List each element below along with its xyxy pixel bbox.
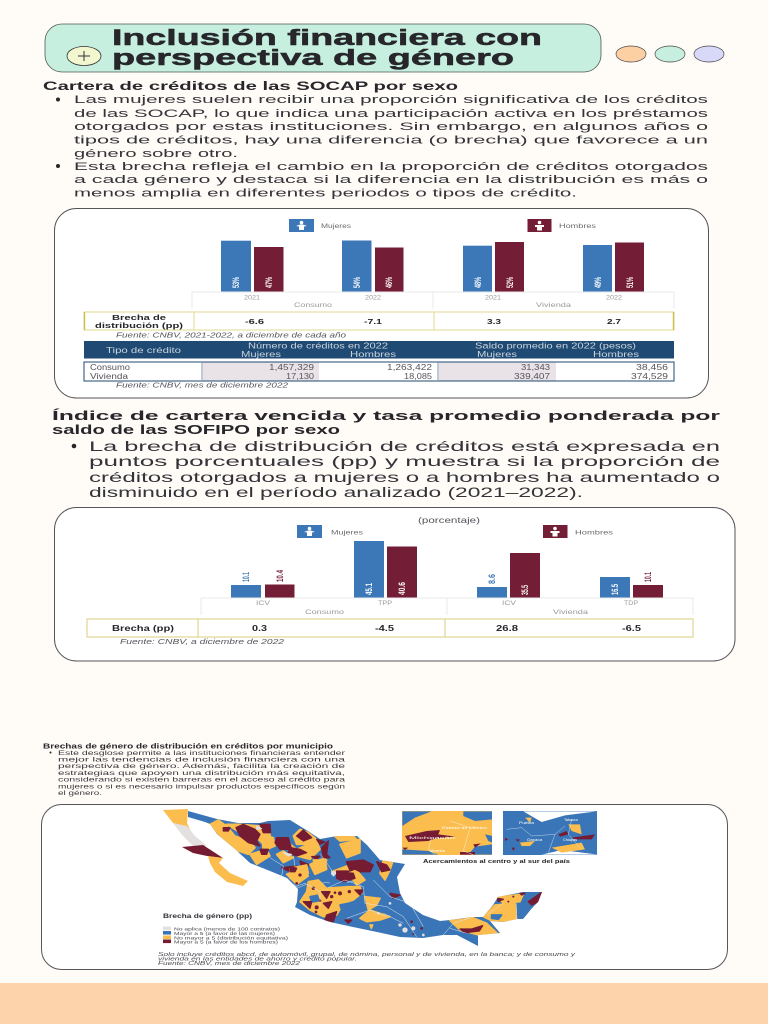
bar chart: SOCAP share by sex: Vivienda (536, 303, 572, 309)
table: créditos and saldo: Mujeres (241, 350, 281, 359)
map legend: No mayor a 5 (distribución equitativa) (174, 936, 289, 942)
text block: SOCAP bullets: menos amplia en diferentes periodos o tipos de crédito. (74, 188, 577, 200)
bar chart: ICV and TPP: 35.5 (520, 585, 530, 595)
table: créditos and saldo: 31,343 (521, 363, 551, 372)
table: créditos and saldo: Número de créditos en 2022 (248, 342, 389, 350)
central and south municipalities (290, 860, 542, 937)
heading: SOFIPO section (52, 408, 720, 437)
icon: plus badge (67, 46, 101, 66)
text block: SOFIPO bullet: La brecha de distribución de créditos está expresada en (89, 438, 720, 454)
source note: Fuente: CNBV, 2021-2022, a diciembre de cada año (116, 330, 346, 340)
mainland (188, 811, 542, 946)
table: créditos and saldo: 17,130 (286, 372, 315, 381)
bar chart: ICV and TPP: TPP (378, 601, 392, 607)
inset map: centre: Morelos (430, 848, 445, 853)
map legend: Brecha de género (pp) (163, 913, 252, 920)
text block: SOFIPO bullet: disminuido en el período analizado (2021–2022). (89, 484, 583, 500)
bar chart: SOCAP share by sex: 52% (505, 277, 515, 288)
inset map: south: Oaxaca (527, 837, 543, 842)
table row: brecha de distribución: distribución (pp) (95, 321, 184, 330)
title text (112, 25, 542, 70)
text block: SOFIPO bullet: puntos porcentuales (pp) y muestra si la proporción de (89, 453, 720, 469)
table: créditos and saldo: Vivienda (90, 372, 129, 381)
inset map: south: Puebla (519, 820, 535, 825)
bar chart: ICV and TPP: 16.5 (610, 584, 620, 595)
table row: brecha de distribución: -6.6 (245, 317, 264, 326)
table: créditos and saldo: 374,529 (631, 372, 669, 381)
bar chart: SOCAP share by sex: 51% (625, 277, 635, 288)
title banner (45, 24, 601, 72)
text block: SOCAP bullets: a cada género y destaca si la diferencia en la distribución es más o (74, 174, 708, 186)
text block: SOFIPO bullet: créditos otorgados a mujeres o a hombres ha aumentado o (89, 469, 720, 485)
bar chart: SOCAP share by sex: 48% (473, 277, 483, 288)
bar chart: ICV and TPP: 45.1 (364, 583, 374, 595)
text block: municipal bullet: mujeres o si es necesario impulsar productos específicos según (58, 784, 346, 790)
map of Mexico (163, 805, 550, 950)
inset map: centre: Michoacán (409, 835, 455, 840)
heading: SOFIPO section: saldo de las SOFIPO por sexo (52, 422, 340, 437)
inset caption: Acercamientos al centro y al sur del país (423, 859, 570, 865)
table row: brecha: 26.8 (496, 624, 519, 633)
north and west municipalities (210, 820, 360, 888)
map footnote: vivienda en las entidades de ahorro y crédito popular. (158, 956, 357, 962)
bar chart: ICV and TPP: TDP (624, 601, 638, 607)
text block: SOCAP bullets: Las mujeres suelen recibir una proporción significativa de los créditos (74, 94, 709, 106)
text block: SOCAP bullets (56, 94, 709, 200)
bar chart: SOCAP share by sex: 2022 (365, 296, 382, 302)
map legend: Mayor a 5 (a favor de los hombres) (174, 940, 279, 946)
map legend (163, 913, 289, 946)
bar chart: ICV and TPP: 8.6 (487, 574, 497, 584)
table row: brecha de distribución: 3.3 (487, 317, 501, 326)
legend: Mujeres: Mujeres (331, 530, 363, 536)
legend: Hombres (528, 219, 596, 232)
table row: brecha: Brecha (pp) (112, 624, 174, 633)
table row: brecha de distribución: 2.7 (607, 317, 621, 326)
bar chart: ICV and TPP (201, 541, 693, 616)
text block: municipal bullet: considerando si existen barreras en el acceso al crédito para (58, 776, 346, 784)
bar chart: SOCAP share by sex: 54% (352, 277, 362, 288)
bar chart: ICV and TPP: 10.1 (241, 572, 251, 582)
table: créditos and saldo: 1,457,329 (269, 363, 315, 372)
legend: Mujeres (289, 219, 351, 232)
text block: SOCAP bullets: de las SOCAP, lo que indica una participación activa en los préstamos (74, 108, 709, 120)
map legend: No aplica (menos de 100 contratos) (174, 926, 281, 932)
table row: brecha: 0.3 (252, 624, 268, 633)
chart subtitle: (porcentaje) (418, 516, 480, 525)
legend: Hombres (543, 525, 613, 538)
table: créditos and saldo: Mujeres (477, 350, 517, 359)
bar chart: SOCAP share by sex: 53% (231, 277, 241, 288)
map footnote: Solo incluye créditos abcd, de automóvil, grupal, de nómina, personal y de vivienda, en la banca; y de consumo y (158, 952, 576, 958)
table: créditos and saldo: Hombres (593, 350, 639, 359)
decorative colour circles (616, 46, 724, 62)
text block: SOFIPO bullet (72, 438, 720, 500)
bar chart: SOCAP share by sex: 46% (384, 277, 394, 288)
bar chart: ICV and TPP: Vivienda (553, 610, 589, 616)
bar chart: SOCAP share by sex (192, 240, 674, 309)
inset map: centre: Estado de México (442, 825, 488, 830)
table: créditos and saldo: 339,407 (514, 372, 551, 381)
table row: brecha: -4.5 (375, 624, 395, 633)
bar chart: ICV and TPP: ICV (256, 601, 270, 607)
text block: SOCAP bullets: género sobre otro. (74, 148, 238, 160)
legend: Mujeres: Mujeres (321, 224, 351, 230)
map legend: Mayor a 5 (a favor de las mujeres) (174, 931, 276, 937)
bar chart: SOCAP share by sex: 2021 (485, 296, 502, 302)
map footnote: Fuente: CNBV, mes de diciembre 2022 (158, 961, 300, 967)
inset map: south: Chiapas (563, 837, 577, 842)
text block: SOCAP bullets: otorgados por estas instituciones. Sin embargo, en algunos años o (74, 121, 708, 133)
bar chart: ICV and TPP: ICV (502, 601, 516, 607)
table: créditos and saldo (84, 341, 674, 381)
text block: SOCAP bullets: tipos de créditos, hay una diferencia (o brecha) que favorece a un (74, 134, 708, 146)
heading: municipal gaps: Brechas de género de distribución en créditos por municipio (43, 744, 333, 750)
bar chart: SOCAP share by sex: Consumo (294, 303, 333, 309)
inset map: south: Tabasco (564, 817, 579, 822)
heading: SOCAP section: Cartera de créditos de las SOCAP por sexo (43, 81, 458, 93)
table row: brecha: -6.5 (622, 624, 642, 633)
panel: SOFIPO chart (54, 508, 735, 661)
table: créditos and saldo: Consumo (90, 363, 131, 372)
map footnote (158, 952, 576, 967)
bar chart: ICV and TPP: Consumo (305, 610, 345, 616)
table: créditos and saldo: Saldo promedio en 2022 (pesos) (475, 342, 636, 350)
Baja California (163, 809, 248, 886)
text block: municipal bullet: perspectiva de género. Además, facilita la creación de (58, 763, 346, 770)
inset map: centre (402, 811, 492, 855)
panel: map (42, 804, 728, 970)
source note: Fuente: CNBV, a diciembre de 2022 (120, 637, 285, 646)
source note: Fuente: CNBV, mes de diciembre 2022 (116, 380, 289, 390)
text block: SOCAP bullets: Esta brecha refleja el cambio en la proporción de créditos otorgados (74, 161, 709, 173)
panel: SOCAP chart (54, 208, 708, 398)
bar chart: SOCAP share by sex: 2021 (244, 296, 261, 302)
bar chart: ICV and TPP: 40.6 (397, 582, 407, 595)
bar chart: SOCAP share by sex: 2022 (606, 296, 623, 302)
table: créditos and saldo: Hombres (350, 350, 396, 359)
bar chart: SOCAP share by sex: 49% (593, 277, 603, 288)
table: créditos and saldo: 18,085 (404, 372, 433, 381)
table row: brecha de distribución (84, 312, 674, 330)
legend: Mujeres (297, 525, 363, 538)
inset map: south (503, 811, 598, 855)
bar chart: SOCAP share by sex: 47% (264, 277, 274, 288)
text block: municipal bullet: el género. (58, 790, 102, 797)
heading: SOFIPO section: Índice de cartera vencida y tasa promedio ponderada por (52, 408, 720, 423)
table row: brecha de distribución: Brecha de (112, 313, 166, 322)
text block: municipal bullet: mejor las tendencias de inclusión financiera con una (58, 756, 346, 764)
table: créditos and saldo: 38,456 (636, 363, 669, 372)
legend: Hombres: Hombres (559, 224, 596, 230)
footer band (0, 983, 768, 1024)
bar chart: ICV and TPP: 10.4 (275, 570, 285, 582)
title text: perspectiva de género (112, 45, 514, 70)
table: créditos and saldo: Tipo de crédito (106, 346, 182, 355)
table: créditos and saldo: 1,263,422 (387, 363, 433, 372)
table row: brecha de distribución: -7.1 (364, 317, 382, 326)
legend: Hombres: Hombres (575, 530, 613, 536)
title text: Inclusión financiera con (112, 25, 542, 50)
bar chart: ICV and TPP: 10.1 (643, 572, 653, 582)
table row: brecha (87, 619, 693, 637)
text block: municipal bullet: Este desglose permite a las instituciones financieras entender (58, 750, 345, 757)
text block: municipal bullet: estrategias que apoyen una distribución más equitativa, (58, 770, 345, 777)
text block: municipal bullet (50, 750, 346, 797)
